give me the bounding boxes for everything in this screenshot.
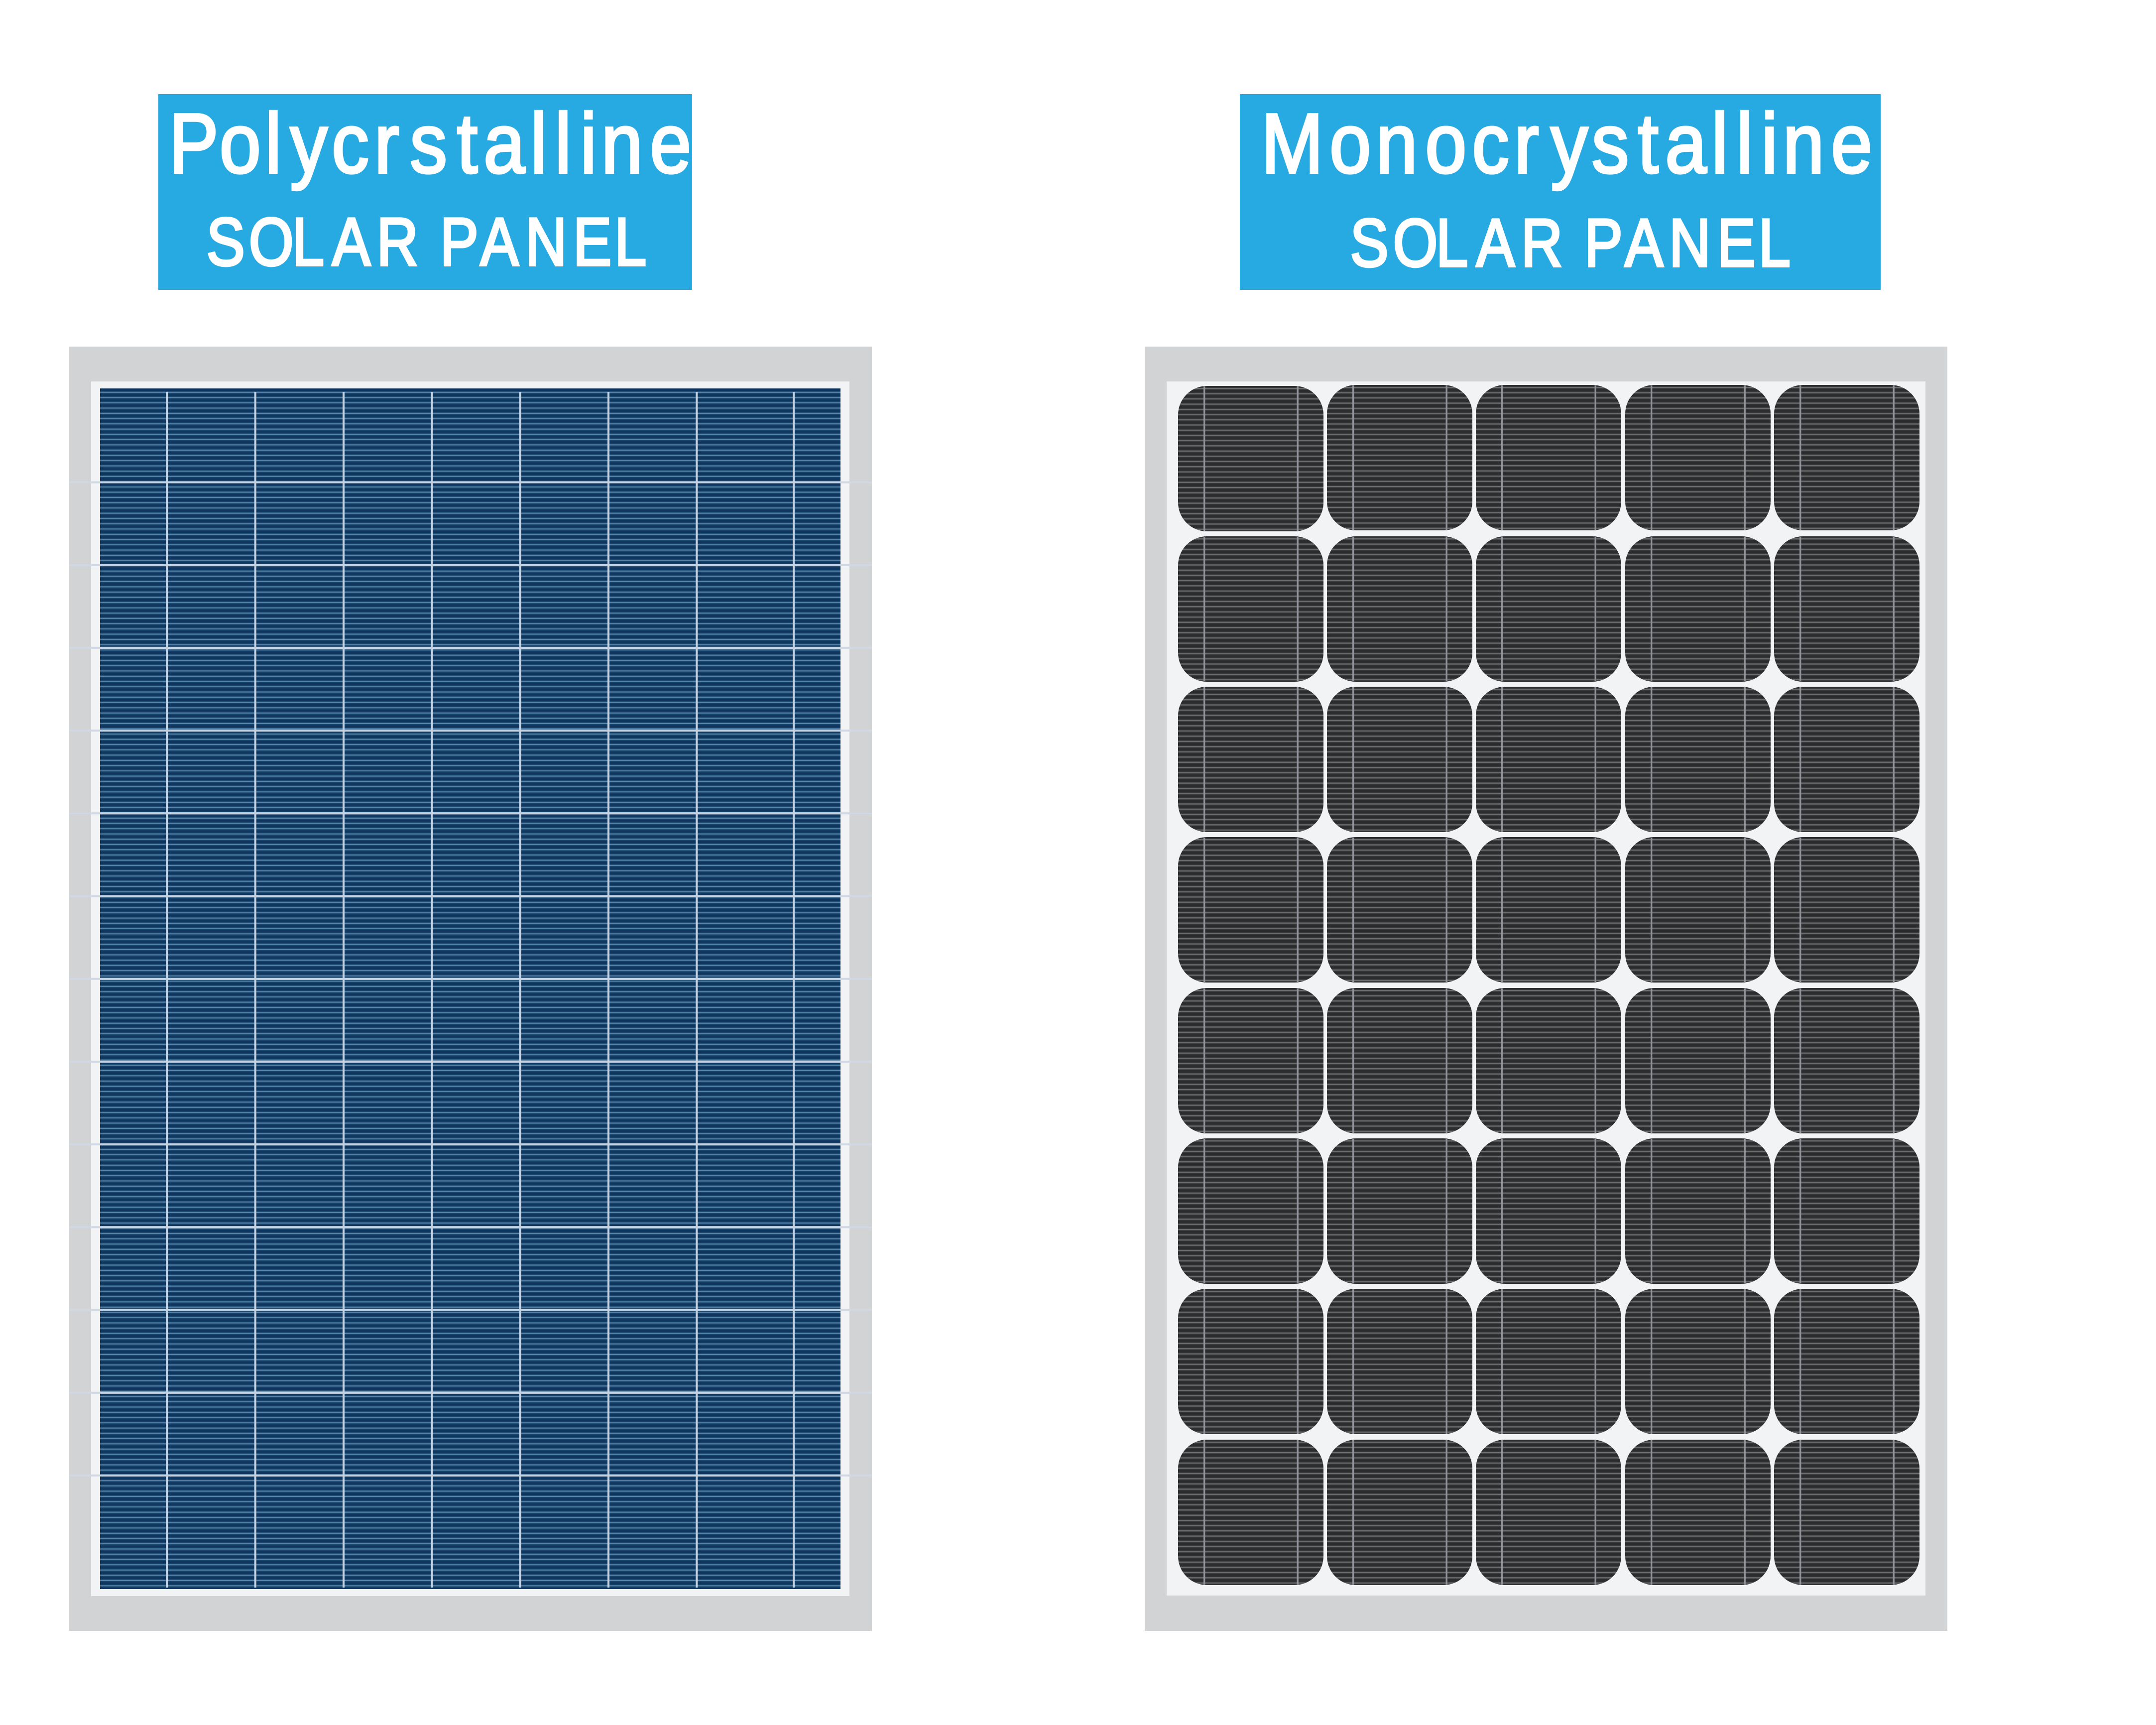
panel: monocrystalline solar panel — [1145, 347, 1947, 1631]
horizontal busbars across frame — [69, 482, 872, 1476]
panel: polycrystalline solar panel — [69, 347, 872, 1631]
heading background — [1240, 94, 1881, 290]
heading background — [158, 94, 692, 290]
panel frame — [69, 347, 872, 1631]
heading subtitle: SOLAR PANEL — [207, 204, 646, 280]
vertical busbars — [167, 392, 794, 1588]
panel backing — [91, 381, 849, 1596]
blue striped cells — [100, 388, 840, 1589]
heading: monocrystalline solar panel — [1240, 94, 1881, 290]
grid of rounded black cells — [1178, 385, 1919, 1585]
heading title: Polycrstalline — [169, 96, 691, 191]
panel backing — [1167, 381, 1925, 1596]
horizontal busbars over cells — [100, 482, 840, 1476]
heading: polycrystalline solar panel — [158, 94, 692, 290]
panel frame — [1145, 347, 1947, 1631]
heading subtitle: SOLAR PANEL — [1350, 205, 1791, 281]
heading title: Monocrystalline — [1261, 96, 1872, 191]
